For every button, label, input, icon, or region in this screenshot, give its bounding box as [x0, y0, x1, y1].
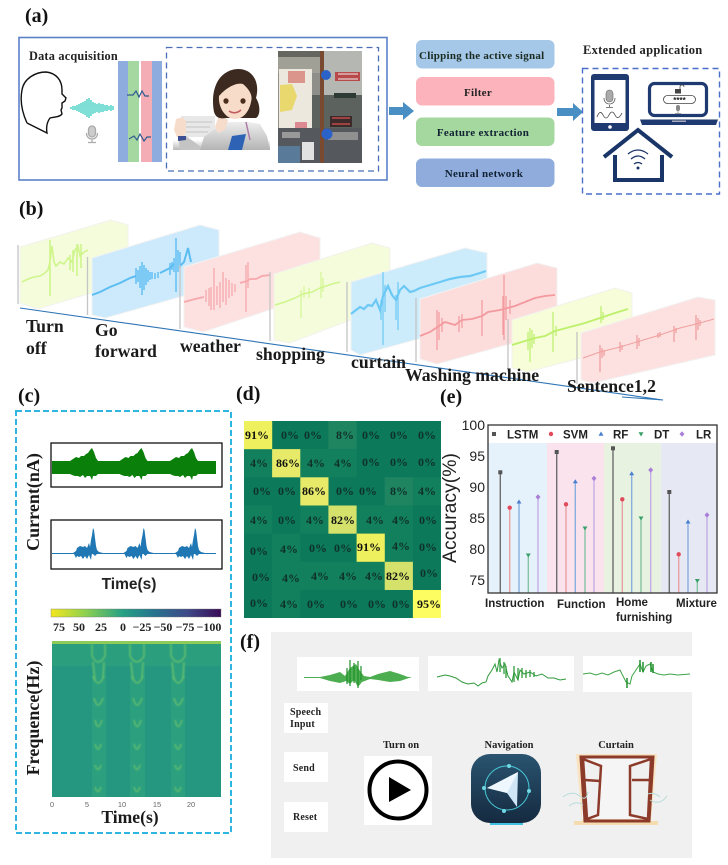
label: go forward: Go [95, 320, 118, 340]
timeline axis [20, 308, 663, 400]
values: row 3: 86% [302, 484, 326, 498]
stems: dt [526, 516, 700, 593]
button: send: Send [293, 763, 315, 774]
waveform card: shopping [270, 243, 390, 343]
values: row 4 [250, 513, 437, 527]
values: row 1: 0% [418, 428, 436, 442]
values: row 7: 0% [307, 597, 325, 611]
panel label: a: (a) [25, 5, 48, 27]
label: turn off: Turn [26, 316, 64, 336]
values: row 2: 0% [390, 455, 408, 469]
values: row 5: 0% [250, 544, 268, 558]
legend: spectrogram colour bar: 0 [120, 620, 126, 634]
label: washing machine: Washing machine [405, 365, 539, 385]
values: row 4: 4% [366, 513, 384, 527]
values: row 7: 95% [417, 597, 441, 611]
legend: classifiers: RF [613, 430, 628, 442]
waveform card: turn off [18, 220, 128, 309]
panel label: d: (d) [236, 383, 260, 405]
values: row 1: 0% [281, 428, 299, 442]
legend: spectrogram colour bar: 50 [73, 620, 85, 634]
stems: rf [516, 471, 690, 593]
icon: play button [364, 756, 432, 825]
values: row 6: 4% [339, 569, 357, 583]
values: row 1: 0% [362, 428, 380, 442]
values: row 4: 0% [278, 513, 296, 527]
plot frame [488, 425, 717, 593]
legend: classifiers: LSTM [507, 430, 538, 442]
values: row 2: 86% [276, 456, 300, 470]
values: row 6: 4% [282, 571, 300, 585]
label: navigation: Navigation [484, 740, 534, 751]
stems: svm [508, 497, 681, 593]
button: speech input: Input [290, 719, 315, 730]
label: curtain control: Curtain [598, 740, 634, 751]
step: neural network [416, 158, 554, 187]
values: row 1: 0% [390, 428, 408, 442]
values: row 4: 4% [392, 513, 410, 527]
values: row 6: 82% [386, 569, 410, 583]
y axis ticks: 90 [469, 479, 485, 495]
button: send [284, 752, 328, 782]
waveform card: sample seven [508, 288, 632, 372]
label: turn off: off [26, 338, 48, 358]
values: row 7 [250, 596, 441, 611]
panel: waveform sequence [18, 220, 715, 400]
values: row 1 [245, 428, 436, 442]
values: row 2: 4% [334, 456, 352, 470]
icon: laptop with password lock: **** [673, 96, 687, 105]
arrow: to extended application [557, 103, 583, 121]
waveform card: curtain [347, 248, 487, 355]
values: row 3: 0% [359, 484, 377, 498]
step: neural network: Neural network [445, 168, 524, 180]
panel: experimenter and setup dashed frame [166, 48, 378, 171]
legend: spectrogram colour bar: −50 [154, 620, 172, 634]
chart: spectrogram: 15 [153, 800, 161, 809]
panel: signal and spectrogram [16, 411, 231, 833]
button: speech input [284, 703, 328, 733]
waveform card: washing machine [416, 263, 557, 364]
values: row 7: 0% [392, 597, 410, 611]
icon: microphone [86, 126, 98, 142]
label: sentence 1,2: Sentence1,2 [567, 376, 656, 396]
waveform card: weather [180, 232, 320, 332]
y axis ticks: 80 [469, 541, 485, 557]
chart: spectrogram: 5 [85, 800, 89, 809]
panel: extended application devices [582, 68, 720, 194]
values: row 2: 0% [418, 455, 436, 469]
legend: classifiers: SVM [563, 430, 588, 442]
values: row 2: 0% [362, 455, 380, 469]
chart: spectrogram: 10 [118, 800, 126, 809]
x axis category labels: furnishing [616, 612, 672, 624]
values: row 5 [250, 539, 437, 558]
icon: navigation app [471, 754, 541, 825]
values: row 5: 4% [280, 542, 298, 556]
x axis category labels: Function [557, 599, 606, 611]
values: row 6: 4% [365, 569, 383, 583]
chart: filtered current trace [51, 520, 222, 569]
legend: classifiers: LR [696, 430, 712, 442]
values: row 5: 0% [309, 541, 327, 555]
chart: spectrogram: 0 [50, 800, 54, 809]
legend: spectrogram colour bar: −100 [197, 620, 221, 634]
chart: accuracy lollipop [439, 417, 717, 624]
values: row 1: 91% [245, 428, 269, 442]
values: row 4: 4% [306, 513, 324, 527]
axis label: accuracy: Accuracy(%) [439, 453, 461, 563]
button: reset [284, 802, 328, 832]
values: row 7: 4% [280, 597, 298, 611]
values: row 3 [253, 484, 436, 498]
heading: extended application: Extended application [583, 43, 703, 57]
waveform: navigation [428, 656, 574, 691]
step: clipping the active signal: Clipping the active signal [419, 50, 544, 62]
icon: tablet with microphone [591, 74, 629, 131]
axis label: current: Current(nA) [23, 453, 44, 551]
icon: smart home with wifi [604, 130, 672, 180]
label: go forward: forward [95, 341, 157, 361]
legend: spectrogram colour bar: 75 [53, 620, 65, 634]
values: row 6 [252, 566, 438, 585]
x axis category labels: Home [616, 597, 648, 609]
step: feature extraction [416, 118, 554, 146]
y axis ticks: 85 [469, 510, 485, 526]
stems: lr [536, 467, 710, 593]
waveform card: sentence 1 and 2 [577, 297, 715, 384]
legend: spectrogram colour bar: 25 [95, 620, 107, 634]
legend: spectrogram colour bar: −75 [176, 620, 194, 634]
step: feature extraction: Feature extraction [437, 127, 529, 139]
label: curtain: curtain [351, 352, 406, 372]
stems: lstm [498, 446, 671, 593]
panel label: c: (c) [18, 385, 40, 407]
legend: spectrogram colour bar: −25 [133, 620, 151, 634]
values: row 3: 0% [278, 484, 296, 498]
chart: confusion matrix [244, 421, 441, 618]
diagram: layered device stack [118, 61, 162, 162]
label: shopping: shopping [256, 344, 325, 364]
y axis ticks [462, 417, 485, 588]
step: filter [416, 77, 554, 106]
icon: speaking head [21, 72, 66, 133]
x axis category labels [485, 597, 717, 624]
panel label: b: (b) [19, 198, 43, 220]
values: row 5: 4% [392, 539, 410, 553]
chart: spectrogram [50, 641, 221, 809]
axis label: spectrogram time: Time(s) [101, 807, 159, 827]
values: row 3: 8% [390, 484, 408, 498]
chart: raw current trace [51, 443, 222, 487]
panel: user interface demo [271, 632, 692, 858]
values: row 4: 82% [331, 513, 355, 527]
values: row 6: 4% [311, 569, 329, 583]
y axis ticks: 75 [469, 572, 485, 588]
panel label: f: (f) [240, 631, 260, 653]
label: weather: weather [180, 336, 241, 356]
values: row 3: 4% [418, 484, 436, 498]
legend: spectrogram colour bar [51, 609, 221, 634]
values: row 5: 91% [357, 540, 381, 554]
waveform: curtain [583, 656, 692, 692]
step: clipping the active signal [416, 40, 554, 68]
values: row 3: 0% [336, 484, 354, 498]
photo: laboratory setup [278, 51, 362, 163]
chart: spectrogram: 20 [187, 800, 195, 809]
step: filter: Filter [464, 87, 492, 99]
panel: signal processing steps [416, 40, 554, 187]
icon: sound wave [70, 98, 113, 118]
values: row 1: 8% [336, 428, 354, 442]
values: row 4: 0% [419, 513, 437, 527]
values: row 2: 4% [250, 456, 268, 470]
label: turn off [26, 316, 64, 358]
y axis ticks: 100 [462, 417, 485, 433]
values: row 7: 0% [340, 597, 358, 611]
waveform: turn on [297, 657, 419, 691]
values: row 5: 0% [334, 541, 352, 555]
illustration: doctor holding card [173, 69, 270, 150]
y axis ticks: 95 [469, 448, 485, 464]
axis label: frequency: Frequence(Hz) [23, 661, 44, 775]
x axis category labels: Mixture [676, 598, 717, 610]
values: row 7: 0% [250, 596, 268, 610]
values: row 2: 4% [307, 456, 325, 470]
values: row 4: 4% [250, 513, 268, 527]
icon: open window with curtain [563, 754, 667, 825]
values: row 3: 0% [253, 484, 271, 498]
label: go forward [95, 320, 157, 361]
legend: classifiers: DT [654, 430, 669, 442]
panel: data acquisition frame [19, 38, 387, 180]
values: row 2 [250, 455, 436, 470]
values: row 7: 0% [368, 597, 386, 611]
legend: classifiers [492, 430, 712, 442]
values: row 1: 0% [304, 428, 322, 442]
values: row 6: 0% [252, 570, 270, 584]
label: turn on: Turn on [383, 740, 419, 751]
x axis category labels: Instruction [485, 598, 544, 610]
values: row 5: 0% [419, 540, 437, 554]
axis label: time: Time(s) [102, 576, 156, 593]
arrow: to signal processing [389, 102, 414, 120]
button: reset: Reset [293, 812, 318, 823]
values: row 6: 0% [420, 566, 438, 580]
button: speech input: Speech [290, 707, 321, 718]
waveform card: go forward [88, 225, 219, 318]
panel label: e: (e) [440, 386, 462, 408]
heading: data acquisition: Data acquisition [29, 49, 118, 63]
